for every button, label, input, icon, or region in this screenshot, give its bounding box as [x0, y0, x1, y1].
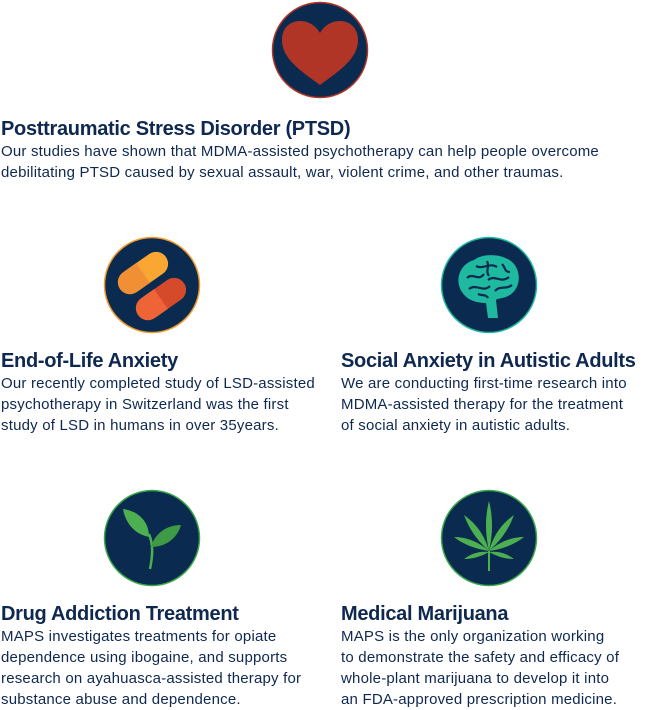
icon: brain — [440, 236, 538, 334]
text: PTSD — [1, 143, 599, 181]
heading: addiction: Drug Addiction Treatment — [1, 603, 239, 625]
text: end-of-life: Our recently completed study of LSD-assisted — [1, 375, 315, 392]
heading: PTSD: Posttraumatic Stress Disorder (PTSD) — [1, 118, 350, 140]
text: end-of-life — [1, 375, 315, 434]
icon: pills — [104, 236, 200, 334]
text: social anxiety: MDMA-assisted therapy for the treatment — [341, 396, 623, 413]
text: PTSD: debilitating PTSD caused by sexual assault, war, violent crime, and other traumas. — [1, 164, 564, 181]
heading: social anxiety: Social Anxiety in Autistic Adults — [341, 350, 636, 372]
text: addiction — [1, 628, 301, 708]
text: social anxiety: of social anxiety in autistic adults. — [341, 417, 570, 434]
text: marijuana: MAPS is the only organization working — [341, 628, 604, 645]
text: addiction: MAPS investigates treatments for opiate — [1, 628, 276, 645]
text: marijuana: to demonstrate the safety and efficacy of — [341, 649, 619, 666]
text: social anxiety — [341, 375, 627, 434]
icon: heart — [272, 2, 368, 98]
heading: marijuana: Medical Marijuana — [341, 603, 508, 625]
text: addiction: dependence using ibogaine, and supports — [1, 649, 287, 666]
text: social anxiety: We are conducting first-time research into — [341, 375, 627, 392]
heading: end-of-life: End-of-Life Anxiety — [1, 350, 178, 372]
text: PTSD: Our studies have shown that MDMA-assisted psychotherapy can help people overcome — [1, 143, 599, 160]
text: end-of-life: study of LSD in humans in over 35years. — [1, 417, 279, 434]
text: marijuana: whole-plant marijuana to develop it into — [341, 670, 609, 687]
icon: leaves — [104, 490, 200, 586]
icon: marijuana leaf — [440, 490, 538, 586]
text: marijuana — [341, 628, 619, 708]
text: end-of-life: psychotherapy in Switzerland was the first — [1, 396, 289, 413]
text: addiction: substance abuse and dependence. — [1, 691, 241, 708]
text: marijuana: an FDA-approved prescription medicine. — [341, 691, 617, 708]
text: addiction: research on ayahuasca-assisted therapy for — [1, 670, 301, 687]
